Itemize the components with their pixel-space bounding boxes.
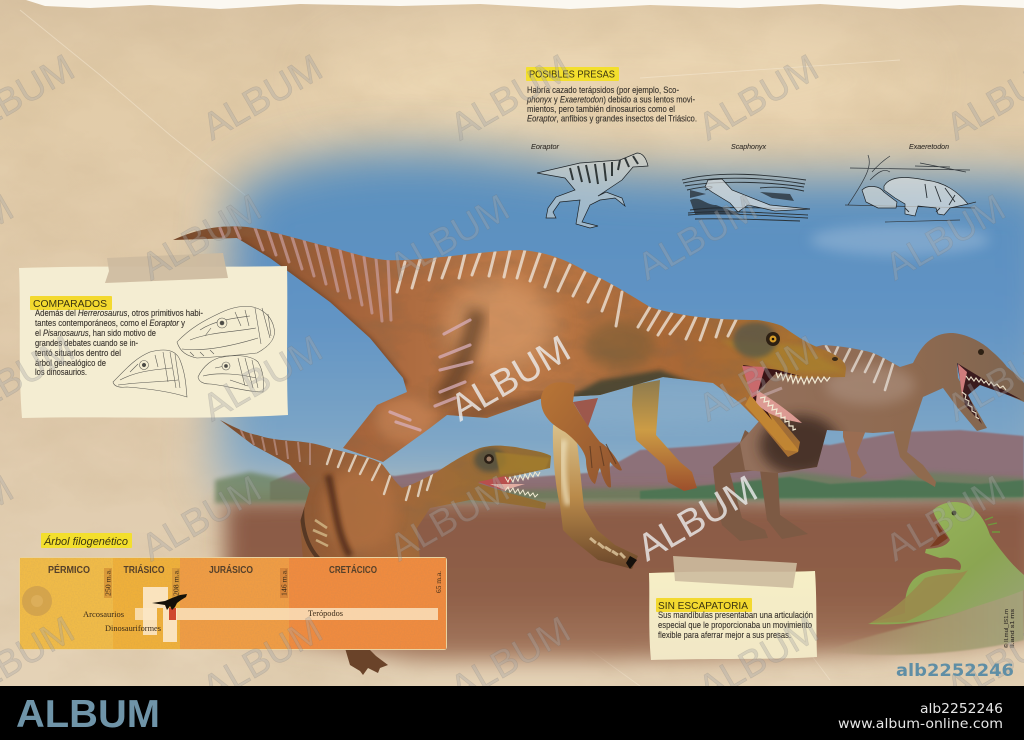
body text [35, 308, 203, 377]
sketch: Eoraptor: Eoraptor [531, 142, 559, 151]
forelimb left [843, 425, 868, 478]
lower teeth [760, 397, 796, 430]
period names [48, 563, 377, 576]
dinosaur silhouette [152, 594, 187, 610]
dinosaur: far leg of main adult [632, 380, 697, 491]
nostril [832, 357, 838, 361]
watermarks: ALBUM [691, 609, 826, 711]
dinosaur: main adult body [170, 220, 850, 465]
tape [673, 556, 797, 588]
body text: tentó situarlos dentro del [35, 348, 121, 358]
watermarks: ALBUM [443, 328, 578, 430]
age tags: 208 m.a. [172, 569, 180, 596]
watermarks: ALBUM [195, 47, 330, 149]
body text: phonyx y Exaeretodon) debido a sus lentos movi- [526, 94, 695, 104]
body text: tantes contemporáneos, como el Eoraptor y [35, 318, 186, 328]
card [649, 571, 817, 660]
watermarks: ALBUM [134, 187, 269, 289]
footer id: alb2252246 [920, 701, 1003, 717]
panel: posibles presas [526, 67, 697, 124]
body text: Habría cazado terápsidos (por ejemplo, Sco- [527, 85, 679, 95]
distant mountains [270, 430, 1024, 500]
heading highlight: POSIBLES PRESAS [529, 70, 615, 80]
stripes [220, 227, 391, 321]
period names: CRETÁCICO [329, 563, 377, 576]
rear eye [978, 349, 984, 355]
body text: flexible para aferrar mejor a sus presas. [658, 630, 791, 640]
watermarks: ALBUM [691, 328, 826, 430]
tree labels: Terópodos [308, 608, 343, 618]
sketch: Scaphonyx: Scaphonyx [731, 142, 766, 151]
watermarks: ALBUM [630, 187, 765, 289]
watermarks: ALBUM [195, 328, 330, 430]
dinosaur: rear adult [713, 333, 1024, 541]
watermarks: ALBUM [878, 187, 1013, 289]
watermarks: ALBUM [443, 47, 578, 149]
disc icon [22, 586, 52, 616]
body text [658, 610, 813, 640]
body text: árbol genealógico de [35, 358, 106, 368]
watermarks: ALBUM [134, 468, 269, 570]
sketch: Eoraptor [531, 142, 648, 228]
body text: el Pisanosaurus, han sido motivo de [35, 328, 156, 338]
base mound [825, 585, 1024, 655]
heading highlight: COMPARADOS [33, 299, 107, 310]
credit, vertical: © Il.mul_IS1.m [1003, 609, 1010, 648]
heading highlight: SIN ESCAPATORIA [658, 601, 748, 612]
period names: TRIÁSICO [124, 563, 164, 576]
juvenile mouth [478, 476, 512, 491]
chart: geological timeline [19, 557, 447, 650]
footer url: www.album-online.com [838, 716, 1003, 732]
tree labels: Arcosaurios [83, 609, 124, 619]
age tags: 250 m.a. [104, 569, 112, 596]
tree branches [135, 587, 438, 642]
heading highlight [30, 296, 112, 310]
panel: sin escapatoria [649, 556, 817, 660]
footer bar [0, 686, 1024, 740]
main mouth [743, 365, 800, 420]
dinosaur: juvenile in foreground [220, 420, 551, 557]
body text: especial que le proporcionaba un movimiento [658, 620, 812, 630]
period bands [19, 557, 447, 650]
watermarks: ALBUM [195, 609, 330, 711]
body text: Eoraptor, anfibios y grandes insectos del Triásico. [527, 114, 697, 124]
ground [225, 495, 1024, 660]
body text: Sus mandíbulas presentaban una articulación [658, 610, 813, 620]
vegetation strip [215, 472, 1024, 503]
tongue [756, 390, 802, 423]
tape [105, 253, 228, 283]
card [19, 266, 288, 418]
red bar [169, 608, 176, 620]
credit, vertical: Il.and s1 ms [1010, 609, 1016, 648]
body text: grandes debates cuando se in- [35, 338, 138, 348]
main eye [766, 332, 780, 346]
footer logo: ALBUM [16, 693, 160, 736]
body text: Además del Herrerosaurus, otros primitivos habi- [35, 308, 203, 318]
period names: PÉRMICO [48, 563, 90, 576]
torn white top edge [26, 0, 1024, 9]
dinosaur: long near leg [553, 425, 638, 569]
rear mouth [957, 363, 1022, 424]
juvenile eye [484, 454, 494, 464]
sketch: three skulls [113, 306, 274, 397]
sketch: Exaeretodon [845, 142, 976, 222]
lizard body [868, 502, 1024, 624]
sketch: Exaeretodon: Exaeretodon [909, 142, 949, 151]
body text [526, 85, 697, 124]
watermarks: ALBUM [630, 468, 765, 570]
dinosaur: main adult near thigh and hand [541, 382, 622, 488]
lizard mouth [930, 523, 948, 547]
sky [215, 151, 1024, 500]
forelimb right [893, 428, 936, 487]
credit, vertical [1003, 609, 1016, 648]
watermarks: ALBUM [382, 187, 517, 289]
lizard eye [952, 511, 956, 515]
period names: JURÁSICO [209, 563, 253, 576]
watermarks: ALBUM [443, 609, 578, 711]
phylogenetic tree heading: Árbol filogenético [43, 535, 128, 548]
body text: los dinosaurios. [35, 367, 87, 377]
watermarks: ALBUM [382, 468, 517, 570]
panel: comparados [19, 253, 288, 418]
age tags: 146 m.a. [280, 569, 288, 596]
sketch: Scaphonyx [682, 142, 810, 221]
rear legs [713, 430, 808, 541]
upper teeth [776, 372, 830, 384]
age tags [104, 568, 443, 598]
watermarks: ALBUM [691, 47, 826, 149]
watermarks: ALBUM [878, 468, 1013, 570]
image id on picture: alb2252246 [896, 661, 1014, 681]
tree labels [83, 608, 343, 633]
tree labels: Dinosauriformes [105, 623, 161, 633]
body [740, 333, 1024, 473]
body text: mientos, pero también dinosaurios como el [527, 104, 675, 114]
foot below chart [345, 648, 388, 675]
age tags: 65 m.a. [434, 571, 443, 593]
prey lizard, green [825, 502, 1024, 655]
